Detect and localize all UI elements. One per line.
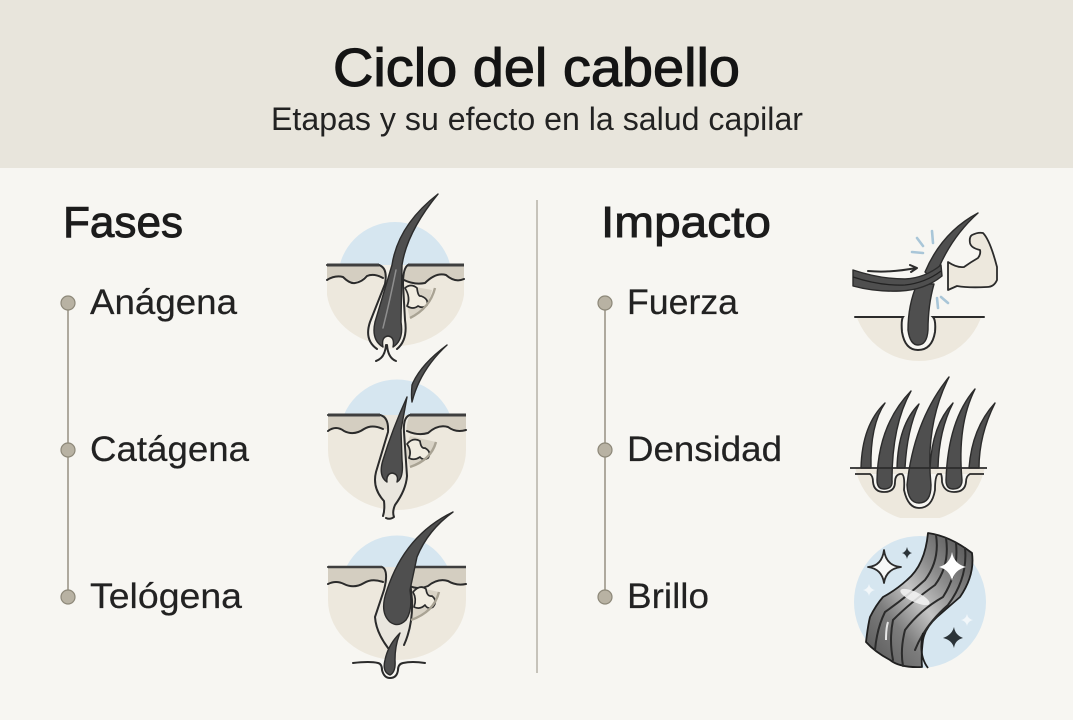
icon: strength — [853, 213, 997, 361]
sparkle: faint on sky — [863, 584, 973, 626]
icon: shine — [854, 533, 986, 668]
title: Ciclo del cabello — [333, 38, 740, 98]
icon: density — [850, 377, 995, 521]
label: Telógena: Telógena — [90, 577, 243, 616]
label: Anágena: Anágena — [90, 283, 238, 322]
label: Densidad: Densidad — [627, 430, 782, 469]
panel: fases — [61, 194, 466, 678]
timeline: fases — [61, 296, 75, 604]
header band — [0, 0, 1073, 168]
subtitle: Etapas y su efecto en la salud capilar — [271, 101, 803, 137]
label: Brillo: Brillo — [627, 577, 709, 616]
divider — [536, 200, 538, 673]
sparkle: bright on hair — [939, 552, 966, 581]
icon: catagen follicle — [328, 345, 466, 519]
timeline: impacto — [598, 296, 612, 604]
sparkle: dark bottom — [943, 627, 963, 648]
heading: Impacto: Impacto — [601, 198, 771, 247]
panel: impacto — [598, 198, 997, 668]
icon: telogen follicle — [328, 512, 466, 678]
sparkle: large outlined — [868, 550, 901, 583]
icon: anagen follicle — [327, 194, 464, 361]
label: Fuerza: Fuerza — [627, 283, 739, 322]
sparkle: small dark top — [902, 547, 912, 559]
heading: Fases: Fases — [63, 198, 183, 247]
label: Catágena: Catágena — [90, 430, 250, 469]
